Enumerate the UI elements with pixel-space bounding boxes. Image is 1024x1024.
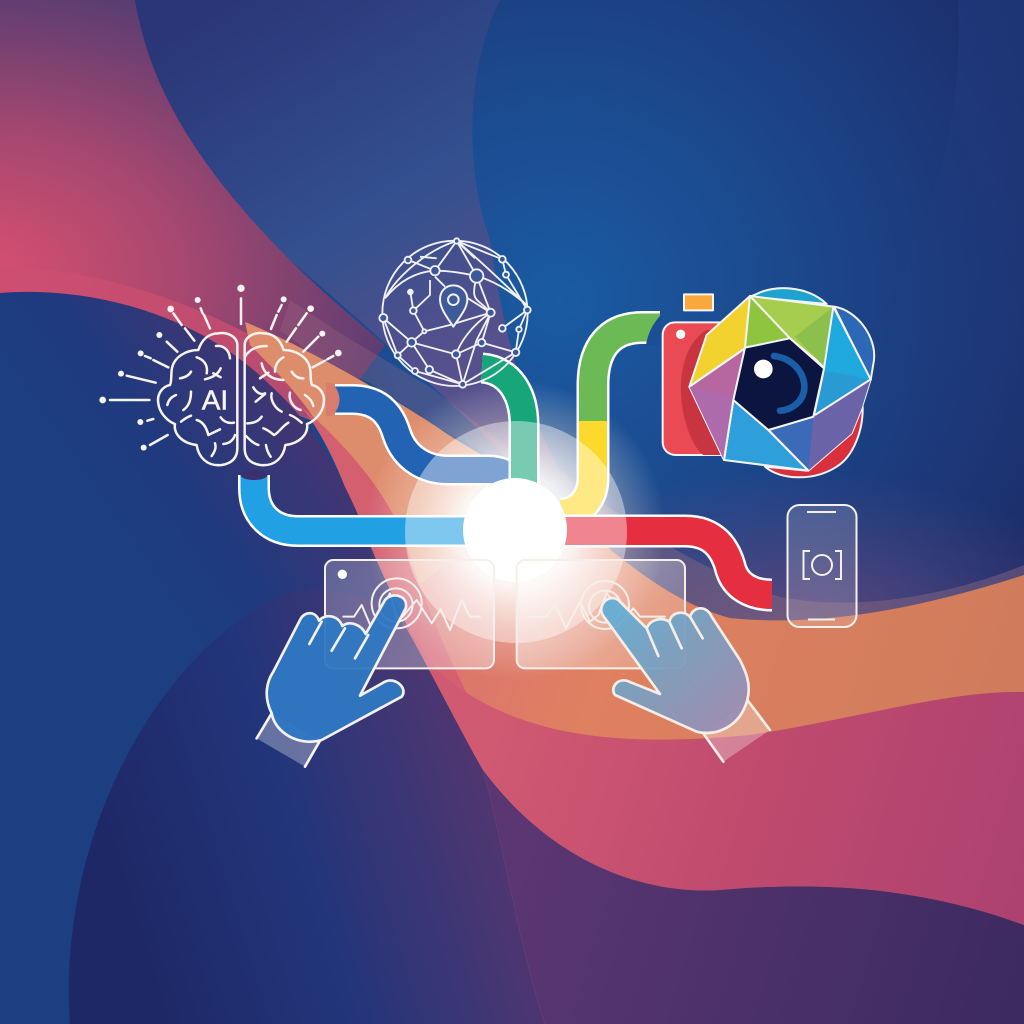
right wrist <box>703 700 770 762</box>
pipe: green and yellow from camera <box>560 328 660 514</box>
bottom purple layer <box>483 770 1024 1024</box>
pipe top cut <box>240 470 268 480</box>
pipe start cut at brain <box>326 383 340 416</box>
left wrist <box>257 713 320 767</box>
icon: right hand <box>601 598 770 762</box>
pipe: dark blue from brain <box>335 400 526 497</box>
pink strip above dark shape <box>0 266 345 420</box>
icon: smartphone <box>788 505 856 627</box>
camera flash <box>684 294 713 310</box>
camera body <box>663 322 730 455</box>
lens centre <box>733 338 824 430</box>
pipe: red to phone <box>556 531 772 595</box>
pink layer <box>400 617 1024 925</box>
icon: camera with aperture <box>663 288 874 477</box>
icon: globe network with location pin <box>379 238 531 388</box>
warm flow <box>400 490 1024 1024</box>
halo <box>405 421 627 643</box>
panel: right touch screen <box>517 560 685 668</box>
hub <box>463 478 567 582</box>
red wedge <box>300 405 470 700</box>
pipe: green from globe <box>482 368 524 490</box>
panel: left touch screen <box>325 560 494 668</box>
mauve stripe <box>280 300 545 475</box>
lens backing shapes <box>750 288 827 304</box>
left dark shape <box>0 292 400 1024</box>
pipe end cut at camera <box>646 315 661 345</box>
label: AI: AI <box>202 384 228 415</box>
brown band <box>540 470 1024 621</box>
icon: left hand <box>257 595 406 767</box>
pipe: light blue to hub <box>254 475 480 531</box>
central glow <box>366 380 666 680</box>
aperture petals <box>689 296 750 387</box>
lower left shape <box>69 589 545 1024</box>
location pin <box>440 285 467 327</box>
brain rays <box>99 285 342 451</box>
orange wedge <box>245 322 545 600</box>
icon: AI brain <box>99 285 342 465</box>
